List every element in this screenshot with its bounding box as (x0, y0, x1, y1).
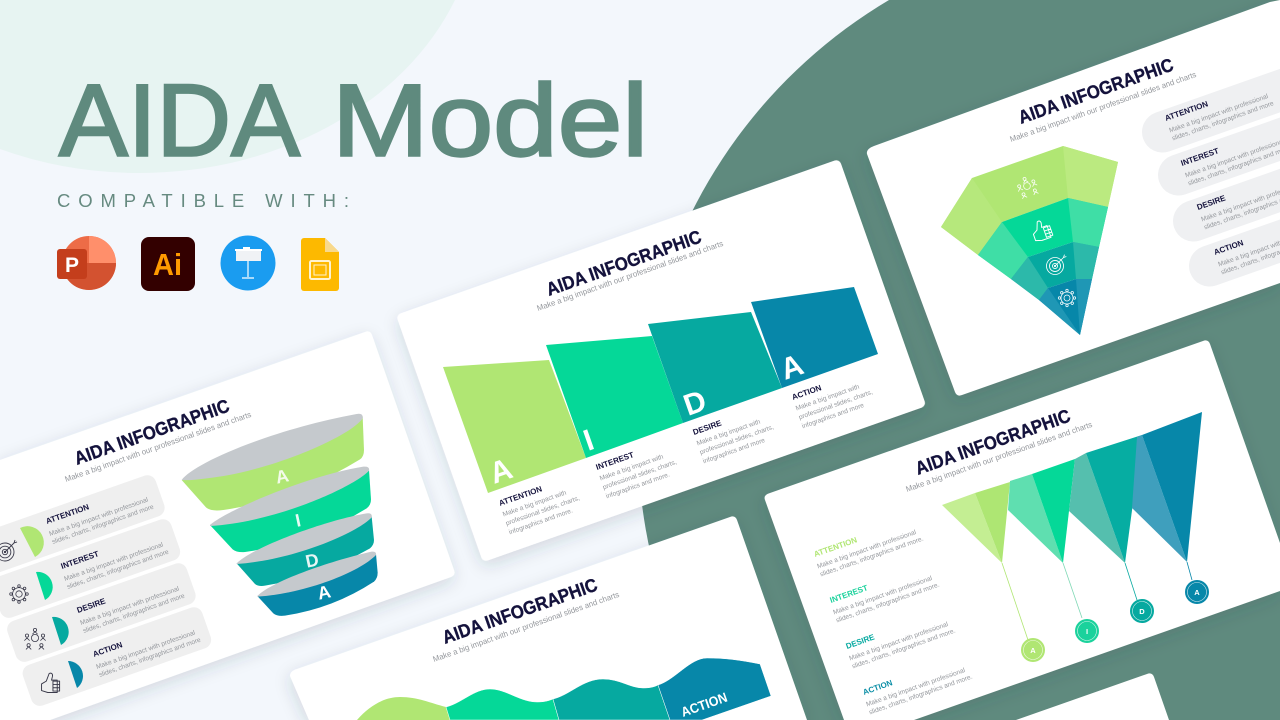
chart: block desire (648, 312, 782, 423)
funnel letters: I (294, 510, 303, 531)
wave label: action: ACTION (679, 690, 729, 720)
panel: bottom right slide (1016, 673, 1169, 720)
row: action: ACTION (92, 640, 124, 659)
background decorative ellipse (0, 0, 455, 173)
chart: diamond layer 3 (1011, 242, 1099, 300)
text: attention: ATTENTION (498, 484, 543, 508)
chart: funnel layer A (182, 414, 364, 510)
text: action: ACTION (862, 678, 894, 697)
block letters (485, 348, 808, 491)
icon: Illustrator (141, 237, 195, 291)
text: desire (692, 415, 778, 465)
chart: triangle action (1132, 412, 1202, 562)
chart: funnel layer I (210, 467, 371, 552)
pill: interest: INTEREST (1180, 146, 1220, 168)
row: interest: Make a big impact with professional (63, 542, 164, 583)
block letters: I (579, 424, 598, 458)
row: action: slides, charts, infographics and more (98, 637, 202, 679)
row: attention (0, 473, 167, 576)
connector lines (1002, 562, 1192, 640)
icon: PowerPoint (57, 236, 116, 290)
block letters: A (776, 348, 808, 387)
icon: people (1015, 174, 1040, 199)
block letters: A (485, 452, 517, 491)
title (59, 64, 648, 178)
chart: triangle interest (1008, 459, 1075, 563)
text: interest: INTEREST (595, 450, 635, 472)
marker: D: D (1139, 607, 1145, 616)
marker: D (1130, 599, 1154, 623)
icon: Google Slides (301, 238, 339, 291)
text: action: professional slides, charts, (798, 389, 874, 421)
chart: triangle attention (942, 482, 1010, 563)
icon: Illustrator: Ai (153, 247, 182, 282)
text: desire: Make a big impact with (696, 419, 761, 447)
chart: wave interest (446, 689, 559, 720)
chart: funnel layer D (237, 513, 374, 586)
row: interest: INTEREST (60, 549, 100, 571)
text: action (791, 380, 877, 430)
subheading: Make a big impact with our professional slides and charts (432, 590, 620, 664)
heading: AIDA INFOGRAPHIC (439, 574, 600, 648)
panel: wave slide (290, 516, 807, 720)
marker: A2: A (1194, 588, 1200, 597)
subtitle: compatible with: COMPATIBLE WITH: (57, 190, 349, 211)
pill: attention: Make a big impact with professional (1168, 93, 1269, 134)
icon: thumb (1030, 218, 1053, 242)
icon: target (1046, 255, 1066, 274)
row: desire (5, 561, 198, 664)
heading: AIDA INFOGRAPHIC (912, 405, 1073, 479)
subheading: Make a big impact with our professional slides and charts (905, 420, 1093, 494)
text: attention: Make a big impact with (502, 490, 567, 518)
funnel letters: A (316, 581, 333, 604)
text: desire: Make a big impact with professional (848, 621, 949, 662)
chart: triangle desire (1069, 435, 1142, 563)
chart: diamond layer 1 (941, 146, 1118, 255)
chart: diamond layer 4 (1039, 279, 1092, 335)
text: attention: ATTENTION (813, 535, 858, 559)
marker: I (1075, 619, 1099, 643)
text: desire: infographics and more (702, 437, 766, 465)
pill: desire: DESIRE (1196, 193, 1227, 212)
funnel letters: A (274, 465, 291, 488)
icon: Keynote (220, 236, 276, 290)
row: attention: ATTENTION (45, 502, 90, 526)
funnel letters (274, 465, 333, 604)
text: interest: Make a big impact with professional (832, 575, 933, 616)
pill: action: ACTION (1213, 238, 1245, 257)
text: desire: slides, charts, infographics and more. (851, 627, 957, 670)
row: interest (0, 517, 183, 620)
chart: block action (751, 287, 878, 388)
pill: interest (1152, 93, 1280, 201)
title: Model (332, 64, 648, 178)
pill: desire (1167, 139, 1280, 247)
heading: AIDA INFOGRAPHIC (543, 226, 704, 300)
text: attention: infographics and more. (508, 507, 574, 536)
text: interest: slides, charts, infographics and more. (835, 581, 941, 624)
chart: block attention (443, 360, 586, 493)
block letters: D (679, 384, 711, 423)
text: attention: Make a big impact with professional (816, 529, 917, 570)
text: interest (595, 450, 681, 500)
panel: diamond slide (867, 0, 1280, 396)
icon: gear (1058, 289, 1076, 307)
text: desire: DESIRE (845, 632, 876, 651)
marker: A2 (1185, 580, 1209, 604)
chart: wave attention (357, 697, 450, 720)
text: action: Make a big impact with professional (865, 667, 966, 708)
row: attention: Make a big impact with professional (48, 497, 149, 538)
text: attention: slides, charts, infographics and more. (819, 535, 925, 578)
subheading: Make a big impact with our professional slides and charts (536, 239, 724, 313)
text: interest: Make a big impact with (599, 454, 664, 482)
row: action: Make a big impact with professional (95, 630, 196, 671)
row: action (20, 605, 214, 708)
chart: wave action (658, 658, 771, 720)
subheading: Make a big impact with our professional slides and charts (64, 410, 252, 484)
funnel letters: D (304, 549, 321, 572)
text: interest: infographics and more. (605, 471, 671, 500)
text: action: Make a big impact with (795, 384, 860, 412)
subheading: Make a big impact with our professional slides and charts (1009, 70, 1197, 144)
marker: A (1021, 638, 1045, 662)
panel: triangles slide (765, 340, 1280, 720)
marker: I: I (1086, 627, 1088, 636)
marker: A: A (1030, 646, 1036, 655)
text: desire: DESIRE (692, 418, 723, 437)
text: attention (498, 484, 584, 536)
icon: PowerPoint: P (65, 254, 79, 277)
pill: attention: ATTENTION (1164, 99, 1209, 123)
panel: staircase slide (396, 159, 926, 562)
chart: diamond layer 2 (978, 198, 1108, 279)
heading: AIDA INFOGRAPHIC (1015, 54, 1176, 128)
text: attention: professional slides, charts, (505, 495, 581, 527)
chart: wave desire (553, 679, 670, 720)
row: desire: DESIRE (76, 596, 107, 615)
text: interest: professional slides, charts, (602, 459, 678, 491)
chart: funnel layer A bottom (257, 552, 378, 616)
large green background circle (638, 0, 1280, 720)
pill: action (1183, 184, 1280, 292)
text: desire: professional slides, charts, (699, 424, 775, 456)
chart: block interest (546, 336, 683, 458)
text: action: slides, charts, infographics and more. (868, 673, 974, 716)
text: interest: INTEREST (829, 583, 869, 605)
row: desire: slides, charts, infographics and more (82, 593, 186, 635)
heading: AIDA INFOGRAPHIC (71, 395, 232, 469)
pill: attention: slides, charts, infographics and more (1171, 100, 1275, 142)
panel: funnel slide (0, 331, 455, 720)
text: action: ACTION (791, 383, 823, 402)
title: AIDA (59, 64, 300, 178)
row: desire: Make a big impact with professional (79, 586, 180, 627)
text: action: infographics and more (801, 402, 865, 430)
pill: attention (1136, 50, 1280, 158)
row: attention: slides, charts, infographics and more (51, 504, 155, 546)
row: interest: slides, charts, infographics and more (66, 549, 170, 591)
